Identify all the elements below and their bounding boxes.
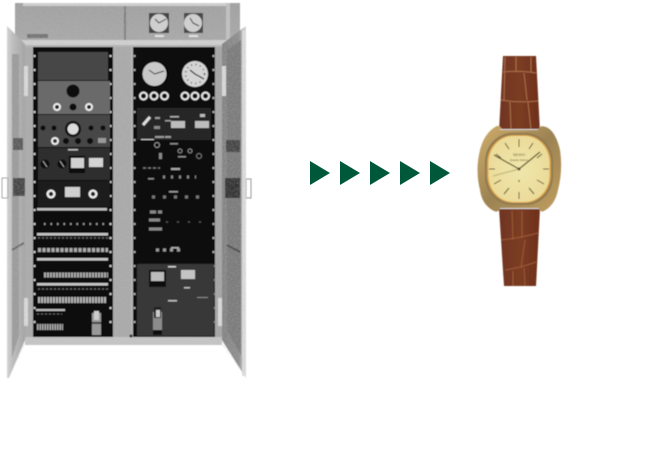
upper strap [499,56,540,132]
watch hands [494,152,540,169]
panel 1 blank [38,52,108,80]
brand text: SEIKO [513,152,525,157]
photo: quartz wristwatch [478,56,561,286]
watch dial [487,135,551,203]
cabinet top housing [15,3,240,46]
terminal strips [36,208,108,327]
left equipment bay [33,47,113,337]
photo: equipment cabinet [0,0,255,380]
gold watch case [478,126,561,212]
right rack rail holes [134,55,214,335]
small labels and meters [137,108,211,250]
large clock right [182,61,208,87]
watch bezel [485,133,553,205]
panel 3 main dial [38,115,110,147]
right equipment bay [130,47,215,338]
ring knobs row [140,92,209,100]
panel 2 knobs [38,81,110,114]
right door [218,26,251,378]
strap steel edges [500,130,539,208]
fuse block [92,311,101,335]
arrows: five green triangles [310,161,450,185]
cabinet body frame [25,45,222,345]
large clock left [142,60,168,88]
panel 4 meters [38,148,110,180]
rack rail holes [34,55,110,335]
left door [2,26,28,378]
infographic canvas [1,2,562,378]
watch dial: Quartz Astron [510,158,529,162]
top clock left [149,13,169,37]
photographic grain over cabinet frame and doors [12,6,245,363]
lower power panel [130,264,214,338]
lower strap [499,208,540,286]
top clock right [184,13,203,37]
hour markers [489,139,549,199]
panel 5 meter and rings [38,181,110,207]
